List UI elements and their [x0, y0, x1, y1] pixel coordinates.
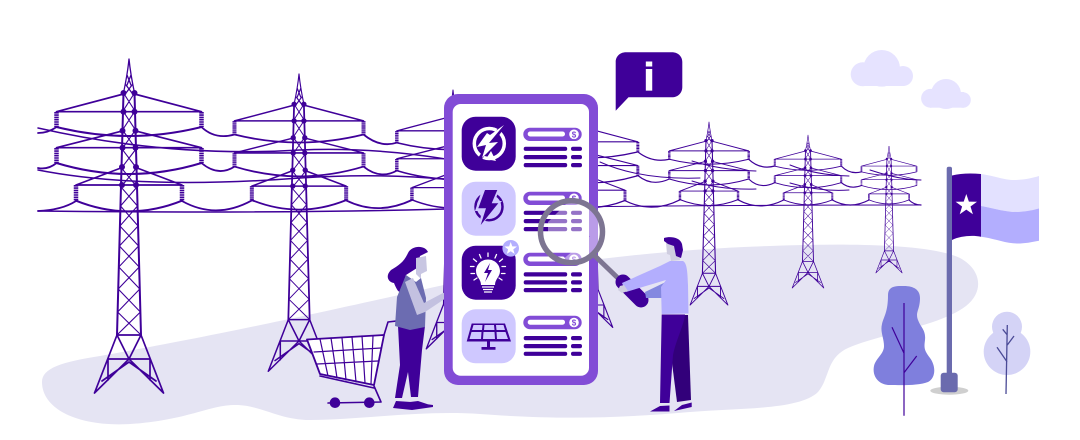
man legs: rear — [671, 315, 691, 402]
man inspecting — [618, 237, 692, 412]
icon: recycle bolt — [462, 117, 516, 171]
list row 4: $ — [572, 318, 577, 328]
ground blob — [42, 245, 978, 424]
phone frame — [444, 94, 598, 385]
woman top — [395, 275, 426, 330]
man neck and face — [666, 243, 680, 261]
man back arm — [645, 279, 674, 298]
list row 3 — [523, 253, 582, 292]
woman hair — [388, 247, 428, 292]
man shoes — [650, 402, 692, 412]
phone screen — [453, 104, 589, 376]
tower 6 — [775, 135, 841, 288]
cloud: large — [851, 50, 913, 87]
power line wires — [38, 127, 921, 212]
list row 1 — [523, 128, 582, 167]
woman arm — [405, 278, 449, 315]
list row 2 — [523, 192, 582, 231]
list row 3: $ — [572, 255, 577, 264]
icon: solar panel — [462, 309, 516, 363]
tower 2 — [234, 74, 364, 371]
flag lilac stripe — [981, 206, 1039, 243]
flagpole base — [941, 373, 958, 392]
tower 3 — [397, 90, 509, 349]
tree: large — [874, 286, 934, 416]
woman shoes — [393, 401, 433, 410]
woman face — [416, 256, 427, 279]
lens tint — [548, 204, 598, 260]
flagpole base shadow — [930, 387, 968, 395]
flag — [930, 167, 1039, 395]
flag star — [956, 194, 977, 214]
lens handle — [595, 256, 622, 282]
cloud: small — [921, 79, 971, 109]
tower 7 — [861, 146, 917, 273]
tower 4 — [542, 107, 638, 327]
icon: bolt in ring — [462, 182, 516, 236]
info speech bubble: i — [644, 57, 654, 100]
woman shopper — [388, 247, 449, 410]
man hand — [618, 285, 628, 293]
phone — [444, 94, 598, 385]
icon: star badge — [502, 240, 519, 257]
info speech bubble — [616, 52, 682, 111]
man legs: front — [660, 314, 685, 403]
handle grip — [623, 282, 641, 300]
transmission towers — [56, 59, 917, 393]
lens ring — [540, 201, 602, 263]
icon: light bulb — [462, 246, 516, 300]
tower 1 — [56, 59, 202, 393]
list row 4 — [523, 316, 582, 356]
list row 1: $ — [572, 130, 577, 139]
magnifying glass — [540, 200, 641, 300]
list row 2: $ — [572, 194, 577, 203]
flag white-lilac stripe — [981, 174, 1039, 212]
woman legs — [395, 326, 425, 398]
tower 5 — [669, 122, 749, 305]
man torso and arm — [622, 261, 688, 314]
tree: small — [984, 312, 1030, 394]
man hair — [664, 237, 683, 258]
shopping cart — [307, 321, 399, 408]
cart wheels — [330, 397, 375, 408]
flagpole — [947, 167, 952, 375]
flag purple field — [952, 174, 981, 240]
